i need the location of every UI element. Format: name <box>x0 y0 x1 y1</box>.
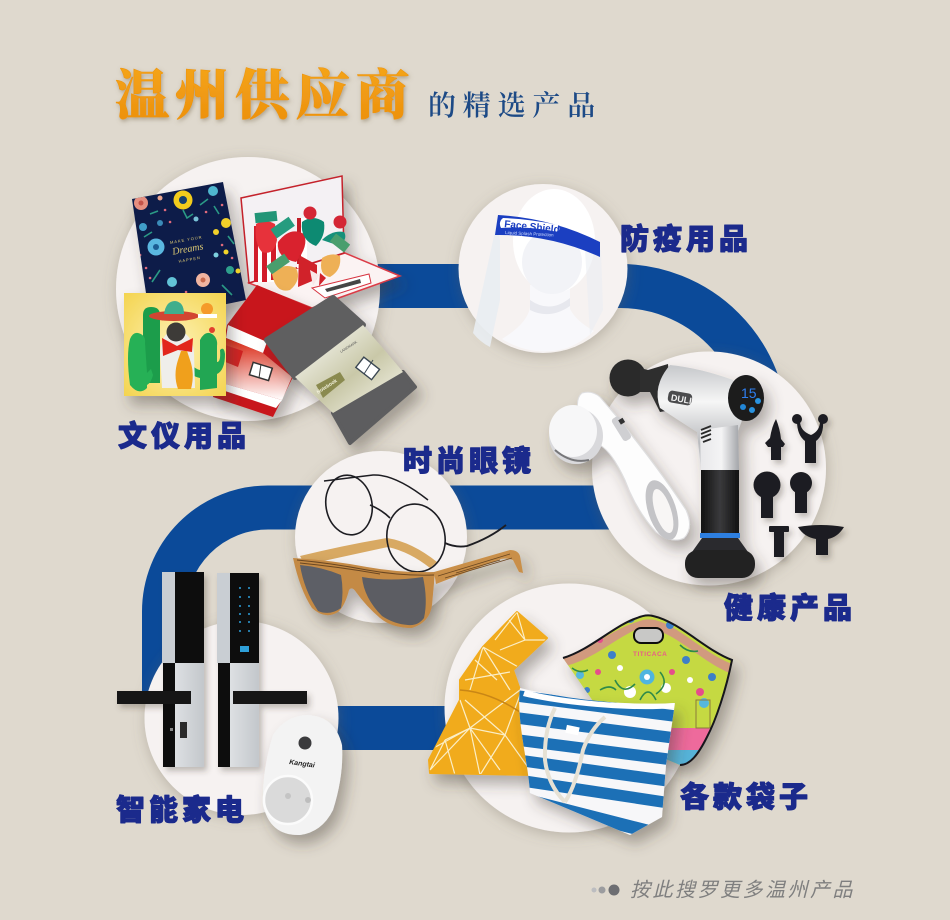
white massager <box>549 392 690 544</box>
face shield <box>473 215 603 347</box>
panel: health products <box>549 352 856 625</box>
pop-up card <box>241 176 400 308</box>
title: blue subtitle: 的精选产品 <box>428 90 602 122</box>
smart plug: Kangtai <box>289 759 316 770</box>
label: 健康产品 <box>724 591 856 625</box>
attachments <box>754 414 844 557</box>
circle: stationery backdrop <box>116 157 380 421</box>
title <box>115 66 602 126</box>
notebook cover text: HAPPEN <box>178 255 201 264</box>
notebook cover text: Dreams <box>171 241 204 258</box>
gray notebook: Notebook <box>316 378 339 396</box>
green floral bag <box>555 610 740 770</box>
panel: bags <box>429 584 812 842</box>
label: 智能家电 <box>116 793 248 827</box>
massage gun <box>610 360 764 578</box>
wire-frame glasses <box>321 471 506 577</box>
circle: eyewear backdrop <box>295 451 467 623</box>
label: 防疫用品 <box>620 222 752 256</box>
blue connecting track <box>164 286 766 728</box>
panel: eyewear <box>293 444 535 628</box>
title: orange heading: 温州供应商 <box>115 66 416 126</box>
panel: smart home <box>116 572 342 835</box>
yellow knot bag <box>429 612 547 775</box>
massage gun: DULI <box>670 392 693 406</box>
circle: health backdrop <box>592 352 826 586</box>
smart plug <box>263 715 342 835</box>
door lock left <box>117 572 204 767</box>
red notebook <box>213 285 312 417</box>
circle: smart home backdrop <box>144 621 338 815</box>
label: 各款袋子 <box>680 780 812 814</box>
door lock right with keypad <box>217 573 307 767</box>
circle: face shield backdrop <box>458 184 628 353</box>
photo: pug with cactus <box>124 293 226 396</box>
footer link <box>592 880 855 902</box>
footer text: 按此搜罗更多温州产品 <box>630 880 855 902</box>
panel: anti-epidemic <box>458 184 752 353</box>
gray notebook: LANDMARK <box>339 340 359 354</box>
green floral bag: TITICACA <box>633 651 667 658</box>
notebook cover text <box>169 234 206 265</box>
panel: stationery <box>116 157 415 453</box>
sunglasses far temple <box>300 538 437 568</box>
gray notebook <box>267 298 415 443</box>
circle: bags backdrop <box>444 584 694 832</box>
mannequin head <box>502 189 595 351</box>
striped tote <box>510 688 690 842</box>
face shield: Face Shield <box>504 219 560 236</box>
wooden sunglasses <box>293 550 523 628</box>
massage gun: 15 <box>741 385 757 401</box>
notebook cover text: MAKE YOUR <box>170 234 203 245</box>
dots icon <box>592 884 620 896</box>
face shield: Liquid Splash Protection <box>505 230 554 238</box>
floral notebook <box>132 182 246 320</box>
label: 时尚眼镜 <box>403 444 535 478</box>
label: 文仪用品 <box>118 419 250 453</box>
